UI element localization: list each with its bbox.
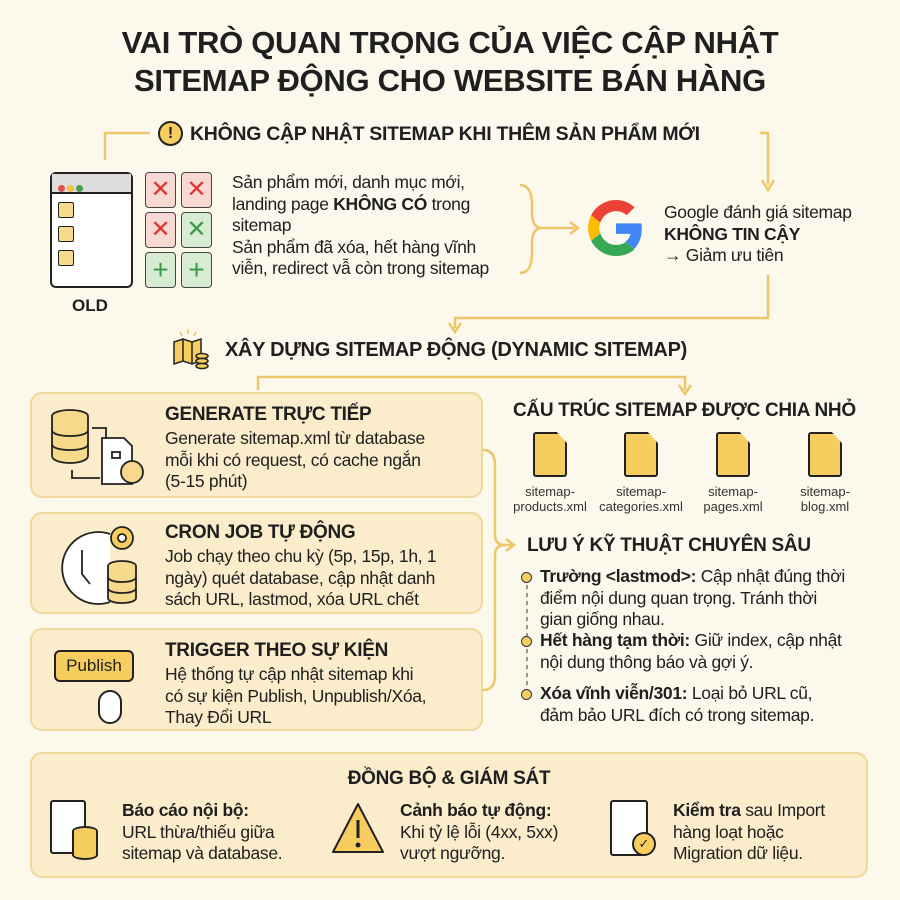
- item: canh bao tu dong: vượt ngưỡng.: [400, 843, 505, 863]
- tech notes list: Xóa vĩnh viễn/301: Loại bỏ URL cũ,: [540, 683, 812, 703]
- file icons: sitemap-: [525, 484, 575, 499]
- icon: blog file: [808, 432, 842, 477]
- icon: google G: [588, 200, 642, 256]
- text: problems: viễn, redirect vẫ còn trong sitemap: [232, 258, 489, 278]
- icon: status grid: ✕: [186, 176, 207, 203]
- panel: trigger: [30, 628, 483, 731]
- text: problems: Sản phẩm mới, danh mục mới,: [232, 172, 465, 192]
- icon: warning circle: !: [168, 125, 173, 142]
- tech notes list: đảm bảo URL đích có trong sitemap.: [540, 704, 814, 724]
- heading: luu y ky thuat: LƯU Ý KỸ THUẬT CHUYÊN SÂU: [527, 535, 811, 556]
- labels: [513, 484, 850, 514]
- icon: map with coins: [173, 329, 209, 370]
- panel: trigger: Thay Đổi URL: [165, 707, 271, 727]
- item: bao cao noi bo: sitemap và database.: [122, 843, 282, 863]
- item: bao cao noi bo: URL thừa/thiếu giữa: [122, 822, 274, 842]
- text: google evaluation: KHÔNG TIN CẬY: [664, 224, 800, 244]
- title: [122, 25, 778, 98]
- icon: categories file: [624, 432, 658, 477]
- panel: cron job: [30, 512, 483, 614]
- panel: dong bo & giam sat: [30, 752, 868, 878]
- file icons: blog.xml: [801, 499, 849, 514]
- icon: status grid: [145, 172, 212, 288]
- item: bao cao noi bo: [50, 800, 282, 863]
- text: problems: [232, 172, 489, 278]
- icon: clock gear database: [61, 526, 137, 605]
- file icons: categories.xml: [599, 499, 683, 514]
- item: kiem tra sau import: hàng loạt hoặc: [673, 822, 784, 842]
- icon: publish button with mouse: Publish: [66, 656, 122, 675]
- item: canh bao tu dong: [332, 800, 558, 863]
- panel: cron job: CRON JOB TỰ ĐỘNG: [165, 522, 355, 543]
- file icons: sitemap-: [708, 484, 758, 499]
- file icons: pages.xml: [703, 499, 763, 514]
- icon: products file: [533, 432, 567, 477]
- icon: status grid: ✕: [150, 176, 171, 203]
- icon: database to file: [51, 409, 144, 485]
- item: kiem tra sau import: Kiểm tra sau Import: [673, 800, 825, 820]
- panel: generate truc tiep: GENERATE TRỰC TIẾP: [165, 404, 371, 425]
- item: canh bao tu dong: Cảnh báo tự động:: [400, 800, 551, 820]
- tech notes list: Hết hàng tạm thời: Giữ index, cập nhật: [540, 630, 842, 650]
- panel: generate truc tiep: mỗi khi có request, có cache ngắn: [165, 450, 421, 470]
- panel: cron job: Job chạy theo chu kỳ (5p, 15p, 1h, 1: [165, 546, 436, 566]
- title: VAI TRÒ QUAN TRỌNG CỦA VIỆC CẬP NHẬT: [122, 25, 778, 60]
- tech notes list: điểm nội dung quan trọng. Tránh thời: [540, 588, 817, 608]
- tech notes list: [521, 566, 845, 724]
- panel: generate truc tiep: (5-15 phút): [165, 471, 247, 491]
- panel: generate truc tiep: [30, 392, 483, 498]
- title: SITEMAP ĐỘNG CHO WEBSITE BÁN HÀNG: [134, 63, 766, 98]
- icon: warning circle: [158, 121, 183, 146]
- panel: trigger: TRIGGER THEO SỰ KIỆN: [165, 640, 388, 661]
- heading: cau truc sitemap: CẤU TRÚC SITEMAP ĐƯỢC CHIA NHỎ: [513, 400, 856, 421]
- icon: old browser: [50, 172, 133, 288]
- item: kiem tra sau import: [610, 800, 826, 863]
- section heading: khong cap nhat: KHÔNG CẬP NHẬT SITEMAP KHI THÊM SẢN PHẨM MỚI: [190, 123, 700, 145]
- file icons: sitemap-: [800, 484, 850, 499]
- item: kiem tra sau import: Migration dữ liệu.: [673, 843, 803, 863]
- tech notes list: nội dung thông báo và gợi ý.: [540, 652, 753, 672]
- file icons: products.xml: [513, 499, 587, 514]
- label: OLD: OLD: [72, 296, 108, 315]
- panel: generate truc tiep: Generate sitemap.xml từ database: [165, 428, 425, 448]
- panel: dong bo & giam sat: ĐỒNG BỘ & GIÁM SÁT: [348, 768, 550, 789]
- icon: status grid: ✕: [150, 216, 171, 243]
- section heading: dynamic sitemap: XÂY DỰNG SITEMAP ĐỘNG (DYNAMIC SITEMAP): [225, 339, 687, 361]
- text: google evaluation: Google đánh giá sitemap: [664, 202, 852, 222]
- text: problems: landing page KHÔNG CÓ trong: [232, 194, 470, 214]
- tech notes list: Trường <lastmod>: Cập nhật đúng thời: [540, 566, 845, 586]
- text: google evaluation: → Giảm ưu tiên: [664, 245, 783, 265]
- tech notes list: gian giống nhau.: [540, 609, 665, 629]
- icon: pages file: [716, 432, 750, 477]
- text: problems: Sản phẩm đã xóa, hết hàng vĩnh: [232, 236, 476, 256]
- text: google evaluation: [664, 202, 852, 265]
- panel: cron job: ngày) quét database, cập nhật danh: [165, 568, 435, 588]
- item: canh bao tu dong: Khi tỷ lệ lỗi (4xx, 5xx): [400, 822, 558, 842]
- panel: trigger: có sự kiện Publish, Unpublish/Xóa,: [165, 686, 426, 706]
- item: kiem tra sau import: ✓: [639, 836, 649, 851]
- panel: trigger: Hệ thống tự cập nhật sitemap khi: [165, 664, 413, 684]
- text: problems: sitemap: [232, 215, 291, 235]
- section heading: dynamic sitemap: [173, 329, 687, 370]
- icon: publish button with mouse: [54, 650, 134, 724]
- panel: cron job: sách URL, lastmod, xóa URL chết: [165, 589, 419, 609]
- icon: status grid: +: [188, 254, 205, 285]
- icon: status grid: +: [152, 254, 169, 285]
- item: bao cao noi bo: Báo cáo nội bộ:: [122, 800, 249, 820]
- file icons: sitemap-: [616, 484, 666, 499]
- file icons: [513, 432, 850, 514]
- icon: status grid: ✕: [186, 216, 207, 243]
